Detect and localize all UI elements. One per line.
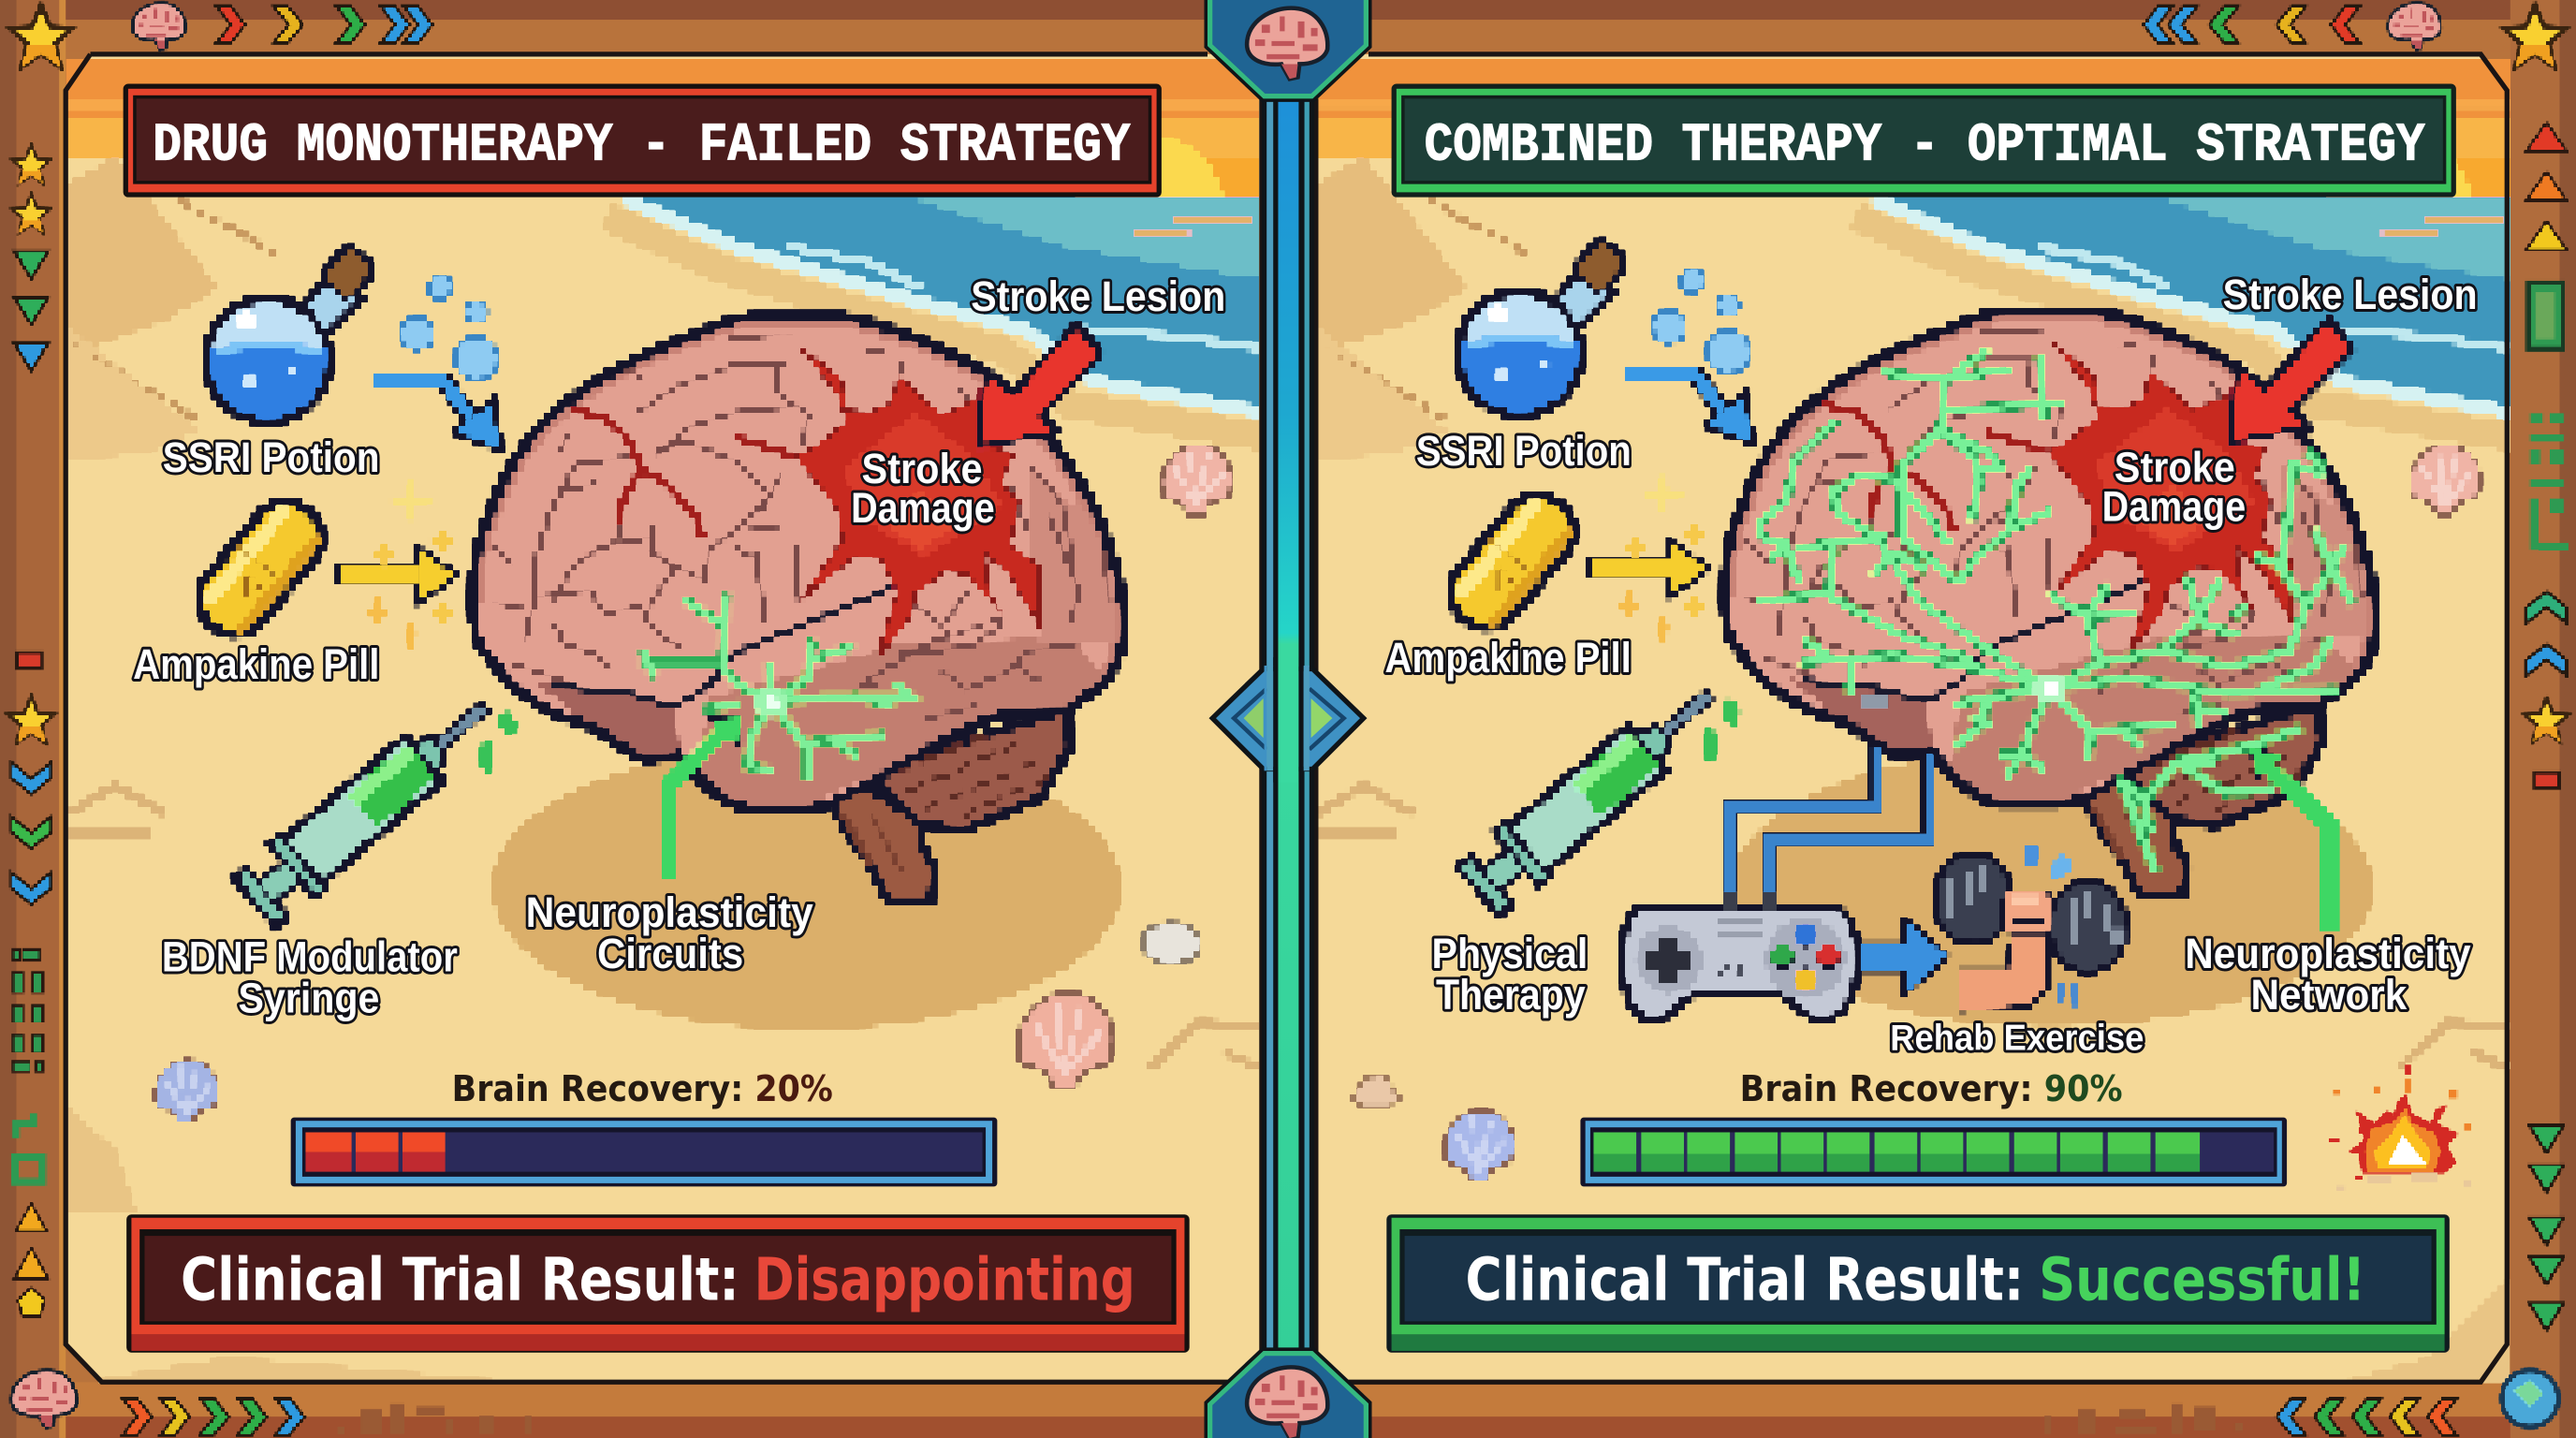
arrow: stroke lesion pointer, left: [977, 326, 1101, 447]
icons: right strip: [2525, 124, 2568, 1329]
result text: right: Clinical Trial Result:: [1466, 1245, 2024, 1314]
arrow: stroke lesion pointer, right: [2230, 320, 2352, 442]
result banner: right: [1386, 1214, 2450, 1353]
centre diamond: [1212, 657, 1364, 783]
icon: globe corner bottom right: [2502, 1371, 2558, 1427]
label: Ampakine Pill right: Ampakine Pill: [1385, 634, 1632, 682]
label: Stroke Damage right: Damage: [2102, 482, 2246, 530]
icon: arm lifting dumbbell: [1936, 844, 2126, 1011]
label: Stroke Damage left: Stroke: [862, 445, 983, 492]
arrow: pill to brain, right: [1588, 475, 1708, 641]
label: BDNF Modulator Syringe: BDNF Modulator: [162, 932, 458, 980]
result text: left: Clinical Trial Result:: [181, 1245, 739, 1314]
recovery label: right: Brain Recovery: 90%: [1740, 1068, 2123, 1110]
label: Stroke Damage right: Stroke: [2115, 443, 2235, 491]
label: Neuroplasticity Network: Network: [2250, 971, 2408, 1019]
result text: left: Disappointing: [754, 1245, 1135, 1314]
bar segments: [1593, 1132, 2200, 1172]
heading: left: DRUG MONOTHERAPY - FAILED STRATEGY: [153, 115, 1131, 176]
icon: Ampakine pill, left: [186, 490, 334, 647]
pebble: grey: [1144, 924, 1199, 963]
icon: chevrons top left: [217, 7, 432, 43]
panel background: right sand: [1316, 54, 2507, 1382]
result text: right: Successful!: [2039, 1245, 2365, 1314]
arrow: potion to brain, left: [374, 381, 501, 450]
brain illustration, right: [1725, 313, 2376, 896]
decorative debris bottom left: [339, 1403, 531, 1434]
label: Physical Therapy: Physical: [1432, 930, 1588, 977]
neuroplasticity circuits, left: [645, 597, 911, 777]
bar segments: [305, 1132, 446, 1172]
label: SSRI Potion right: SSRI Potion: [1416, 427, 1632, 475]
label: Stroke Lesion left: Stroke Lesion: [971, 272, 1225, 320]
icon: chevrons top right: [2144, 7, 2359, 43]
label: SSRI Potion left: SSRI Potion: [163, 433, 379, 481]
icon: explosion: [2329, 1065, 2471, 1191]
centre divider: [1262, 98, 1314, 1356]
label: Neuroplasticity Circuits: Circuits: [597, 930, 743, 977]
shell: pink, left lower: [1018, 993, 1112, 1087]
title banner: left: [124, 84, 1162, 198]
shell: blue, right: [1445, 1111, 1514, 1180]
beach scene: right panel: [1314, 54, 2513, 1381]
recovery label: left: Brain Recovery: 20%: [452, 1068, 833, 1110]
icon: SSRI potion flask, left: [207, 245, 497, 420]
label: Rehab Exercise: Rehab Exercise: [1890, 1019, 2144, 1059]
beach scene: left panel: [66, 54, 1265, 1381]
main illustrations layer: [155, 238, 2480, 1180]
recovery bar: left: [291, 1118, 997, 1186]
title banner: right: [1392, 84, 2456, 198]
icon: brain top right: [2388, 3, 2440, 50]
label: Physical Therapy: Therapy: [1436, 971, 1586, 1019]
label: Neuroplasticity Circuits: Neuroplasticity: [526, 888, 813, 936]
icon: star corner top right: [2505, 6, 2565, 66]
label: Stroke Lesion right: Stroke Lesion: [2223, 271, 2478, 318]
arrow: potion to brain, right: [1627, 374, 1753, 444]
icon: game controller: [1623, 894, 1856, 1019]
icon: star corner top left: [11, 6, 71, 66]
icon: syringe, right: [1456, 669, 1739, 917]
label: Ampakine Pill left: Ampakine Pill: [133, 640, 379, 688]
icon: SSRI potion flask, right: [1459, 238, 1749, 414]
icon: BDNF syringe, left: [233, 681, 516, 929]
label: Neuroplasticity Network: Neuroplasticity: [2185, 930, 2471, 977]
arrow: pill to brain, left: [337, 481, 457, 648]
pebble: small tan: [1354, 1077, 1398, 1106]
icons: chevrons bottom right: [2277, 1399, 2456, 1434]
shell: pink, right upper: [2411, 446, 2480, 514]
brain illustration, left: [473, 317, 1123, 901]
icon: brain top left: [133, 3, 185, 50]
arrow: neuroplasticity pointer, left: [668, 716, 741, 879]
label: BDNF Modulator Syringe: Syringe: [238, 974, 379, 1021]
neuroplasticity network, right: [1756, 349, 2353, 873]
icons: left strip: [8, 146, 53, 1316]
decorative debris bottom right: [2045, 1403, 2243, 1433]
icon: brain corner bottom left: [11, 1371, 76, 1427]
hex badge top: [1204, 0, 1372, 102]
panel outline: left: [66, 54, 1262, 1382]
icon: Ampakine pill, right: [1438, 483, 1586, 640]
panel background: left sand: [66, 54, 1262, 1382]
result banner: left: [126, 1214, 1190, 1353]
cables: controller to brain: [1730, 698, 1928, 901]
panel outline: right: [1316, 54, 2507, 1382]
hex badge bottom: [1204, 1347, 1372, 1438]
arrow: neuroplasticity pointer, right: [2249, 748, 2330, 929]
icons: chevrons bottom left: [124, 1399, 304, 1434]
label: Stroke Damage left: Damage: [851, 484, 995, 532]
recovery bar: right: [1580, 1118, 2287, 1186]
heading: right: COMBINED THERAPY - OPTIMAL STRATEGY: [1425, 115, 2425, 176]
shell: blue, left: [155, 1061, 217, 1122]
shell: pink, left upper: [1163, 446, 1231, 514]
arrow: controller to exercise: [1858, 918, 1949, 994]
